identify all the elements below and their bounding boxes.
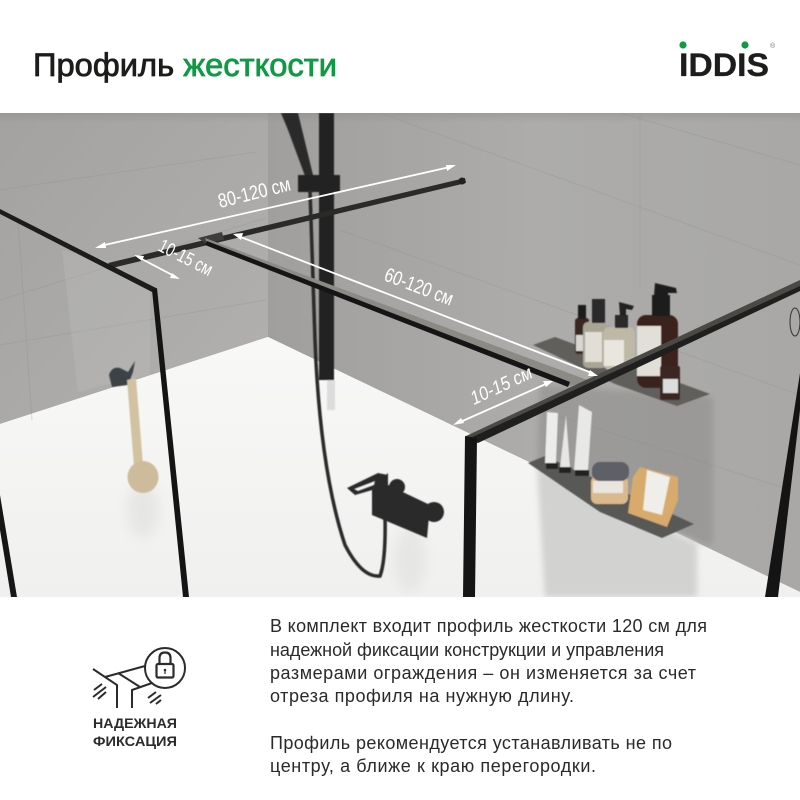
white lower wall [0,337,800,597]
icon: secure fixing with padlock [93,648,185,708]
photo: shower enclosure [0,113,800,597]
label 60-120 см: 60-120 см [381,264,456,310]
label 10-15 см right: 10-15 см [467,363,536,410]
right panel top frame [466,280,800,441]
description paragraph 1: размерами ограждения – он изменяется за счет [270,663,696,683]
far left upright [0,495,17,597]
shower rail and head [281,113,385,576]
middle bar [205,238,590,386]
left panel upright [152,288,189,597]
logo: IDDIS: ® [770,42,776,50]
left wall [0,113,268,424]
title: Профиль жесткости [33,47,337,83]
description paragraph 1: отреза профиля на нужную длину. [270,686,574,706]
label 10-15 см left: 10-15 см [155,236,216,281]
spray bottle [583,322,607,368]
tile joints [0,113,800,490]
large amber bottle [637,315,678,388]
pump bottle [603,327,635,370]
dimension arrow 10-15 left [134,255,180,279]
shelf shadow on white wall [537,468,697,597]
right wall [268,113,800,592]
description paragraph 2: Профиль рекомендуется устанавливать не по [270,733,672,753]
mixer and brush shadows [130,491,422,586]
bar end fitting [458,178,466,184]
far right upright [765,373,800,597]
description paragraph 1: В комплект входит профиль жесткости 120 см для [270,616,707,636]
glass reflection [66,268,150,333]
lower shelf with tubes, jar and box [528,405,694,538]
top shelf with bottles [533,283,710,406]
dimension arrow 10-15 right [453,381,553,425]
icon caption: ФИКСАЦИЯ [93,733,177,749]
logo: IDDIS: IDDIS [679,47,769,83]
small amber vial [660,366,680,400]
description paragraph 1: надежной фиксации конструкции и управления [270,640,664,660]
top stiffener bar [108,178,466,268]
left panel top frame [0,209,156,293]
wall sticker [790,308,800,336]
icon caption: НАДЕЖНАЯ [93,715,177,731]
dimension arrow 80-120 [95,165,456,248]
description paragraph 2: центру, а ближе к краю перегородки. [270,756,596,776]
top shade [0,113,800,117]
back brush on hook [109,361,158,493]
small dark bottle [575,318,589,354]
right panel upright [463,436,477,597]
shelf shadow on wall [537,385,713,545]
mixer [347,473,444,538]
label 80-120 см: 80-120 см [216,174,293,213]
dimension arrow 60-120 [233,233,598,376]
